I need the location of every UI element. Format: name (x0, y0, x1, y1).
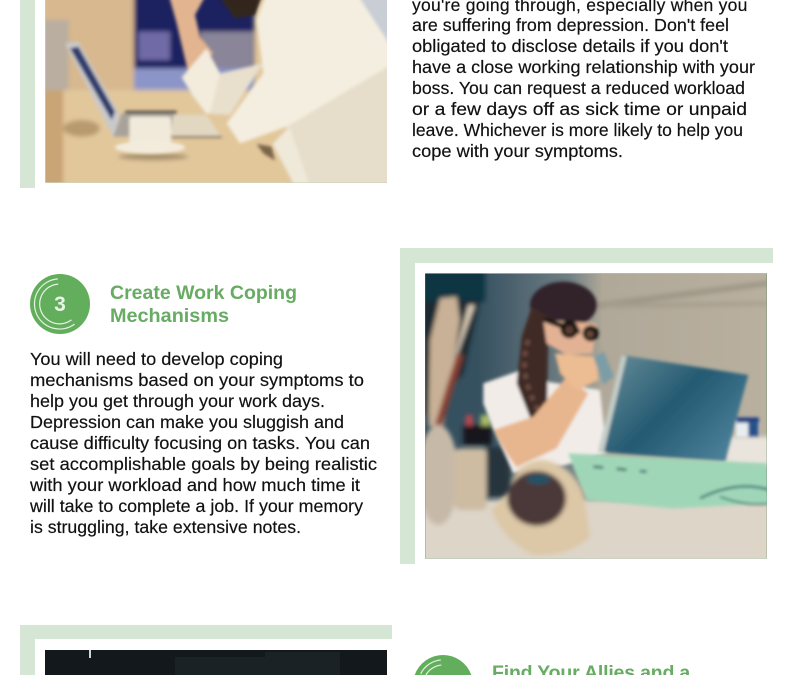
panel: step 3 text block (29, 349, 377, 537)
panel: photo frame, step 4 (20, 625, 392, 675)
panel: step 2 text block: are suffering from depression. Don't feel (412, 15, 729, 35)
icon: step number 3: 3 (54, 293, 66, 316)
panel: step 3 text block: with your workload and how much time it (29, 475, 360, 495)
photo: man leaning over a laptop (40, 0, 393, 187)
panel: step 3 text block: help you get through your work days. (30, 391, 325, 411)
panel: step 2 text block: or a few days off as sick time or unpaid (412, 99, 747, 119)
frame accent bar (20, 0, 35, 188)
panel: step 2 text block: boss. You can request a reduced workload (412, 78, 745, 98)
panel: step 2 text block: obligated to disclose details if you don't (412, 36, 728, 56)
panel: step 3 text block: is struggling, take extensive notes. (30, 517, 301, 537)
panel: step 3 text block: cause difficulty focusing on tasks. You can (30, 433, 370, 453)
panel: step 3 text block: set accomplishable goals by being realistic (30, 454, 377, 474)
panel: step 2 text block: have a close working relationship with your (412, 57, 755, 77)
frame accent bars (400, 248, 773, 564)
panel: step 3 text block: Depression can make you sluggish and (30, 412, 344, 432)
panel: step 3 text block: mechanisms based on your symptoms to (30, 370, 364, 390)
heading: step 3 (110, 282, 297, 327)
heading: step 3: Mechanisms (110, 305, 229, 327)
panel: step 2 text block (412, 15, 755, 161)
photo: woman frowning at a laptop (417, 267, 777, 563)
panel: step 2 text block: cope with your symptoms. (412, 141, 623, 161)
panel: step 3 text block: You will need to develop coping (30, 349, 283, 369)
icon: step number 4 (415, 655, 471, 675)
frame accent bars (20, 625, 392, 675)
heading: step 3: Create Work Coping (110, 282, 297, 304)
photo: dark office windows (45, 650, 387, 675)
panel: photo frame, step 3 (400, 248, 777, 564)
panel: photo frame, step 2 (20, 0, 393, 188)
panel: step 2 text block: leave. Whichever is more likely to help you (412, 120, 743, 140)
icon: step number 3 (30, 274, 90, 334)
panel: step 3 text block: will take to complete a job. If your memory (29, 496, 363, 516)
